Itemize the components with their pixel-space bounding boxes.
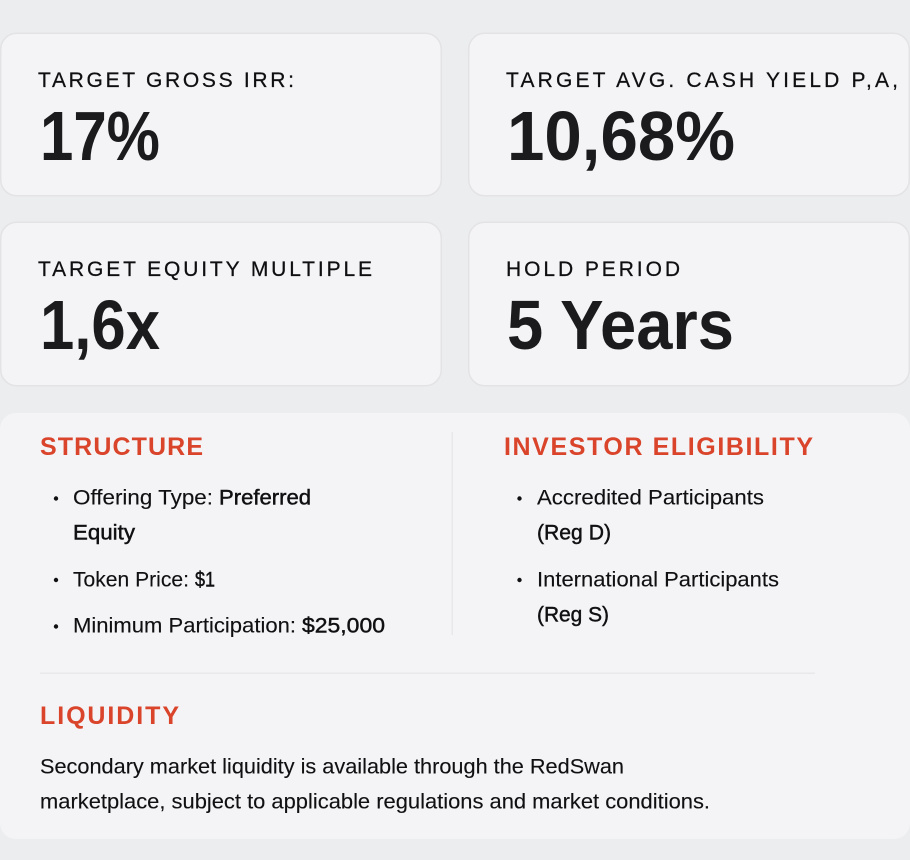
card: target equity multiple: [1, 222, 441, 386]
section: liquidity: [40, 702, 710, 814]
card: target equity multiple: TARGET EQUITY MULTIPLE: [38, 258, 372, 281]
card: target gross IRR: TARGET GROSS IRR:: [38, 69, 294, 92]
panel: details: [0, 413, 910, 839]
card: hold period: HOLD PERIOD: [506, 258, 680, 281]
card: target average cash yield: TARGET AVG. CASH YIELD P,A,: [506, 69, 898, 92]
section: investor eligibility: [504, 433, 813, 626]
list: structure items: Minimum Participation:: [73, 614, 296, 638]
list: eligibility items: (Reg S): [537, 604, 609, 626]
text: liquidity description: [40, 756, 710, 814]
card: hold period: 5 Years: [507, 286, 734, 364]
list: structure items: Preferred: [219, 486, 311, 510]
list: eligibility items: (Reg D): [537, 522, 611, 544]
card: target average cash yield: [469, 33, 909, 196]
list: structure items: Offering Type:: [73, 486, 213, 510]
section: structure: [40, 433, 385, 638]
list: structure items: Token Price:: [73, 568, 189, 592]
text: liquidity description: Secondary market liquidity is available through the RedSwan: [40, 756, 624, 778]
card: target equity multiple: 1,6x: [40, 286, 160, 364]
list: eligibility items: Accredited Participants: [537, 486, 764, 510]
card: target gross IRR: [1, 33, 441, 196]
list: eligibility items: [517, 486, 779, 626]
list: eligibility items: International Participants: [537, 568, 779, 592]
list: structure items: Equity: [73, 522, 136, 544]
list: structure items: $25,000: [302, 614, 385, 638]
text: liquidity description: marketplace, subject to applicable regulations and market conditions.: [40, 790, 710, 814]
heading: structure: STRUCTURE: [40, 433, 203, 461]
card: hold period: [469, 222, 909, 386]
card: target gross IRR: 17%: [40, 97, 160, 175]
list: structure items: [54, 486, 385, 638]
card: target average cash yield: 10,68%: [507, 97, 735, 175]
heading: investor eligibility: INVESTOR ELIGIBILITY: [504, 433, 813, 461]
heading: liquidity: LIQUIDITY: [40, 702, 179, 730]
list: structure items: $1: [195, 568, 215, 592]
